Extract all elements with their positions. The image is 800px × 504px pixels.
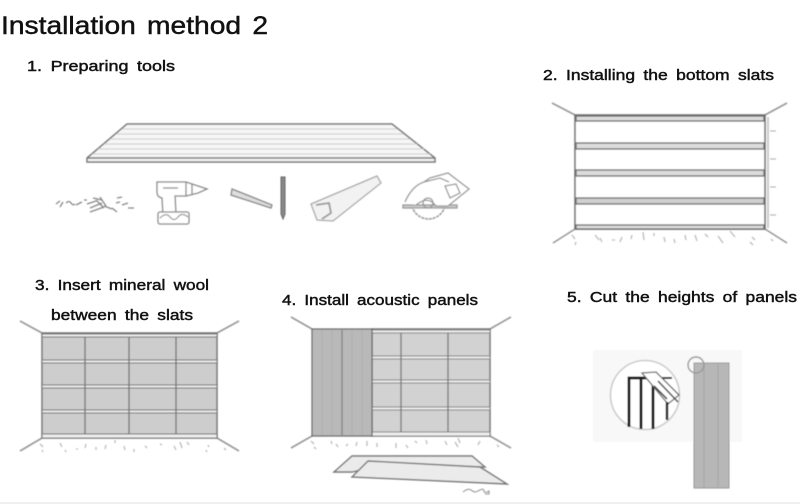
wall corner lines [291,317,511,448]
pale background [593,350,742,442]
wall frame [575,115,765,229]
panel: step 3 wall with mineral wool [20,321,239,452]
slats [372,330,490,436]
wall corner lines [552,103,787,243]
icon: pencil [281,177,285,219]
panel: step 4 wall with acoustic panels [291,317,511,494]
slats [42,334,217,438]
studs [85,337,176,434]
slats [576,116,764,229]
icon: screws [56,197,134,212]
exposed wool section [372,329,490,436]
right side post and marks [767,117,769,228]
floor debris [311,438,499,449]
mineral wool fill [42,333,217,438]
tall panel [694,363,729,488]
icon: saw handle [316,203,331,219]
small detail circle [688,357,704,373]
panel: step 5 cutting [593,350,742,488]
heading: step 3: between the slats [51,307,193,324]
acoustic panel board [87,124,435,162]
installed acoustic panels [312,329,372,436]
title: Installation method 2 [1,12,268,40]
spare panels on floor [334,456,507,484]
icon: circular saw [403,173,469,219]
heading: step 3: 3. Insert mineral wool [35,277,209,294]
icon: drill [157,182,207,224]
scribble mark [463,489,489,494]
heading: step 5: 5. Cut the heights of panels [567,289,797,306]
floor debris [572,231,773,245]
icon: ruler [231,189,272,208]
heading: step 3 [35,277,209,324]
panel: step 2 wall with slats [552,103,787,245]
floor debris [40,440,226,452]
heading: step 1: 1. Preparing tools [27,58,175,75]
wall corner lines [20,321,239,451]
magnified detail circle [610,360,680,430]
heading: step 4: 4. Install acoustic panels [282,292,478,309]
icon: hand saw [311,176,381,221]
heading: step 2: 2. Installing the bottom slats [543,67,774,84]
studs [401,333,448,432]
panel: step 1 tools [56,124,469,224]
